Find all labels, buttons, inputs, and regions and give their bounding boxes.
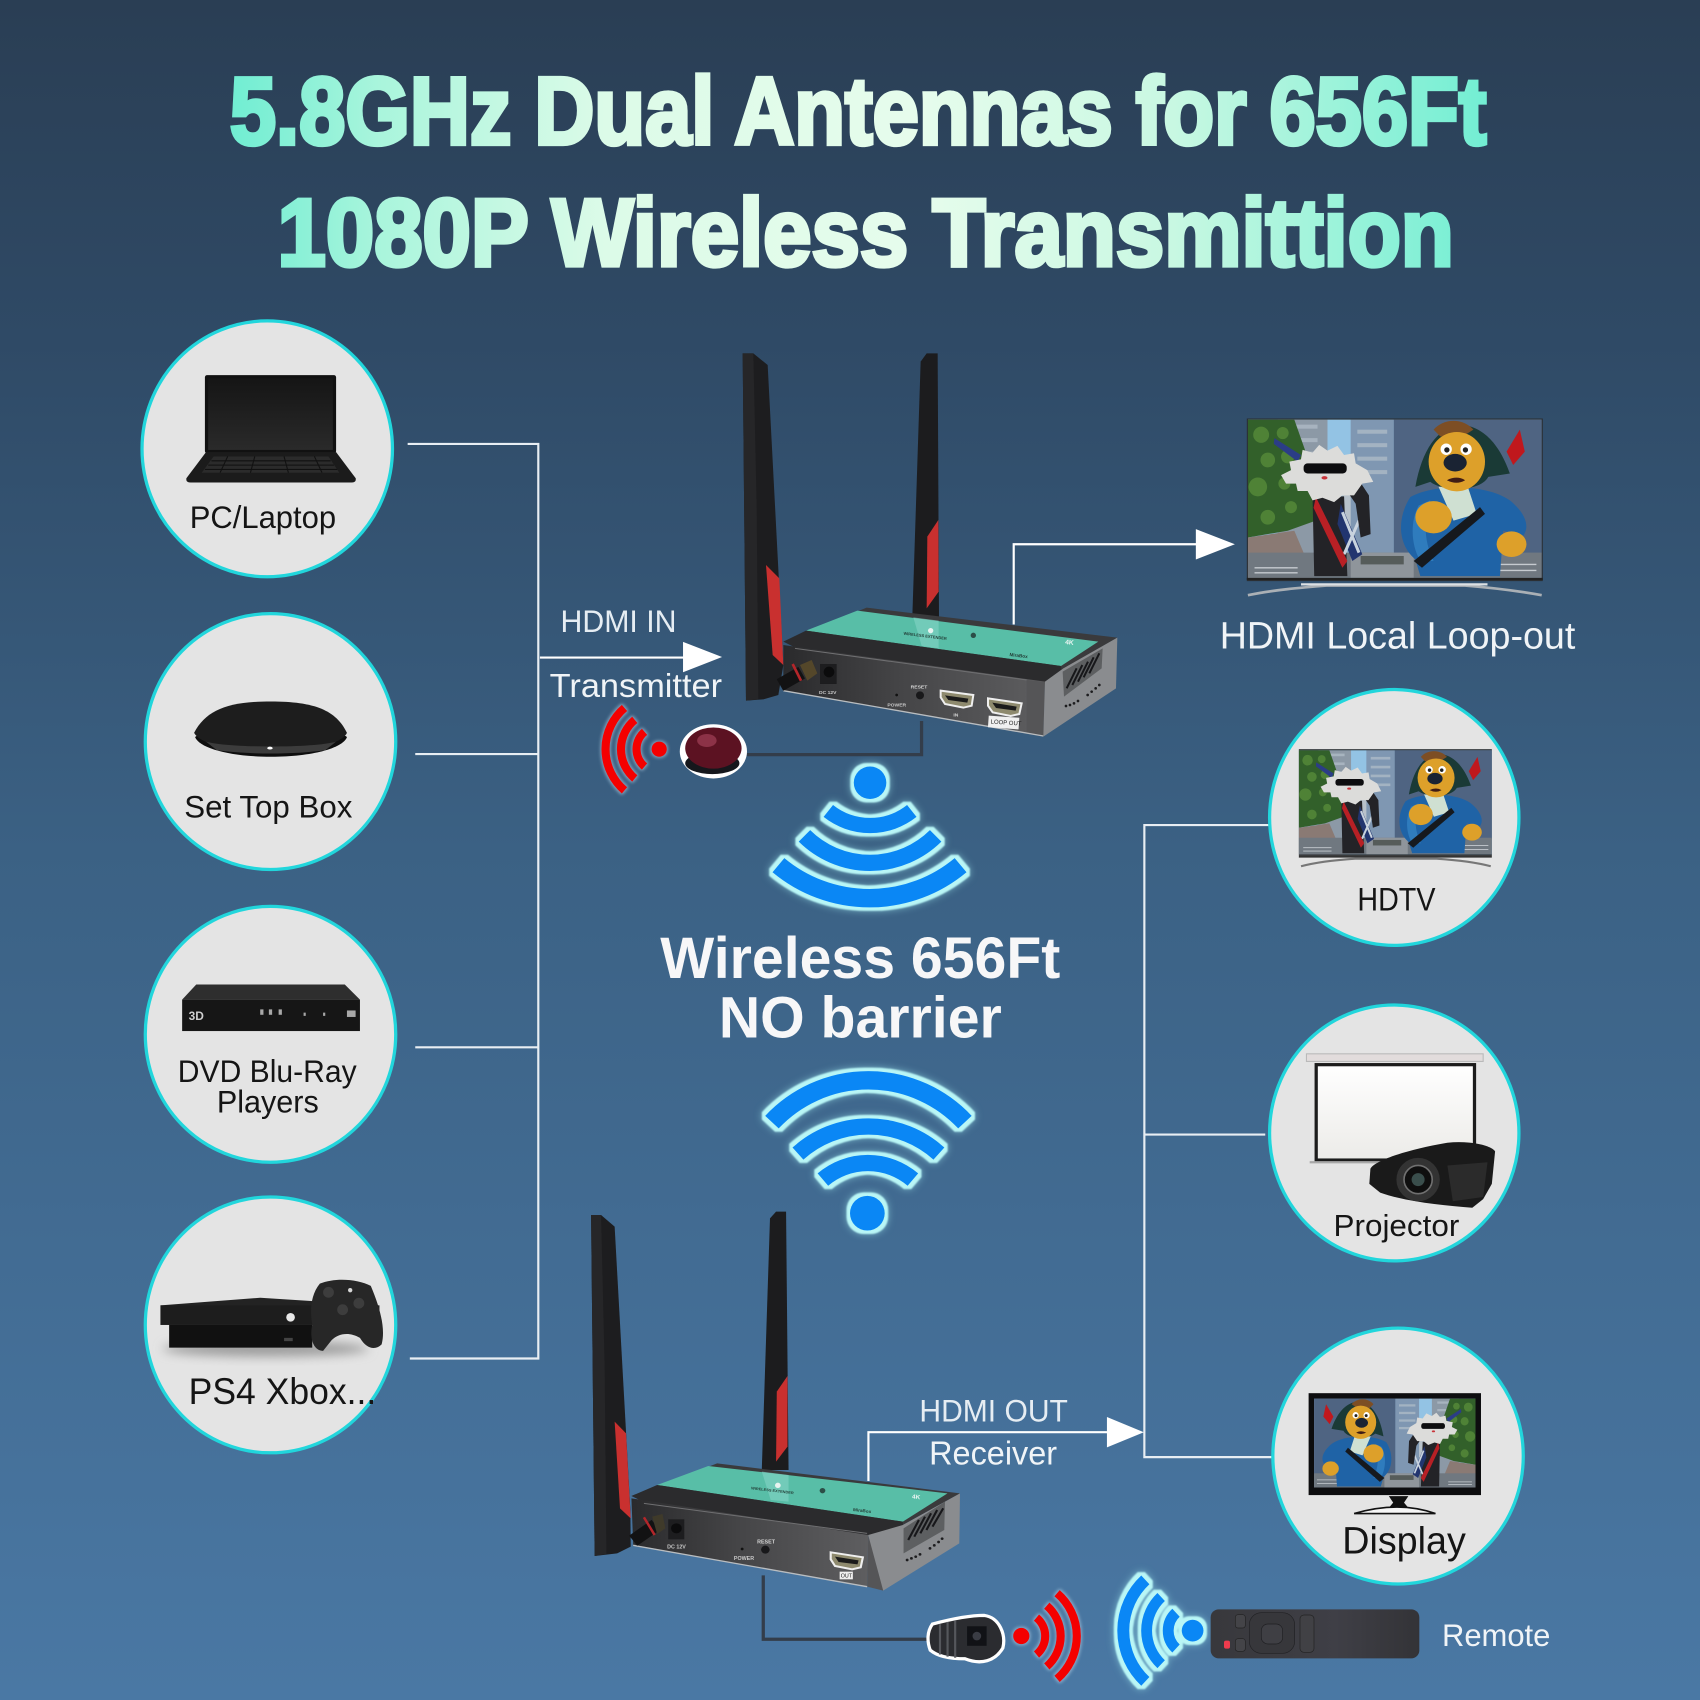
- label: Remote: Remote: [1442, 1618, 1550, 1653]
- icon: game console and controller: [160, 1280, 383, 1356]
- transmitter device: LOOP OUT: [990, 719, 1022, 728]
- TV: HDMI local loop-out: [1247, 418, 1543, 595]
- icon: monitor: [1309, 1393, 1481, 1514]
- transmitter device: MiraBox: [1009, 652, 1028, 659]
- receiver device: RESET: [757, 1539, 776, 1545]
- icon: blu-ray player: 3D: [189, 1009, 204, 1023]
- transmitter device: 4K: [1065, 639, 1074, 647]
- label: Transmitter: Transmitter: [550, 668, 722, 705]
- icon: set top box: [194, 701, 347, 757]
- remote control: [1211, 1609, 1419, 1658]
- transmitter device: [743, 353, 1117, 737]
- icon: red IR waves, receiver: [1013, 1593, 1077, 1679]
- panel: PS4 Xbox: [145, 1197, 396, 1453]
- label: DVD Blu-Ray Players: [178, 1054, 357, 1119]
- transmitter device: DC 12V: [819, 690, 837, 696]
- transmitter device: POWER: [887, 703, 907, 709]
- icon: HDTV set: [1299, 749, 1492, 866]
- icon: wifi signal, top: [778, 767, 961, 898]
- label: HDMI Local Loop-out: HDMI Local Loop-out: [1220, 615, 1576, 657]
- panel: HDTV: [1270, 690, 1519, 945]
- panel: PC/Laptop: [142, 321, 392, 577]
- label: PC/Laptop: PC/Laptop: [190, 500, 336, 535]
- title: 5.8GHz Dual Antennas for 656Ft: [230, 59, 1486, 165]
- receiver device: DC 12V: [667, 1544, 686, 1550]
- icon: blue remote signal: [1123, 1580, 1203, 1681]
- panel: DVD Blu-Ray Players: [145, 906, 396, 1162]
- receiver device: POWER: [734, 1556, 754, 1562]
- title: [230, 59, 1486, 287]
- IR cable: transmitter: [747, 721, 922, 755]
- icon: projector: [1369, 1142, 1495, 1208]
- label: Set Top Box: Set Top Box: [184, 789, 353, 824]
- label: Receiver: Receiver: [929, 1436, 1057, 1473]
- label: Display: Display: [1342, 1521, 1466, 1563]
- panel: Projector: [1270, 1005, 1519, 1261]
- arrow: HDMI IN: [540, 642, 722, 672]
- icon: wifi signal, bottom: [772, 1080, 965, 1231]
- icon: projection screen: [1306, 1054, 1483, 1162]
- arrow: HDMI OUT: [868, 1417, 1144, 1481]
- panel: Display: [1273, 1328, 1523, 1584]
- icon: red IR waves, transmitter: [606, 708, 667, 790]
- heading: Wireless 656Ft NO barrier: Wireless 656Ft: [660, 926, 1060, 991]
- heading: Wireless 656Ft NO barrier: [660, 926, 1060, 1051]
- icon: blu-ray player: [182, 984, 360, 1031]
- label: PS4 Xbox: PS4 Xbox...: [189, 1371, 376, 1412]
- IR emitter: transmitter: [680, 724, 747, 778]
- IR cable: receiver: [763, 1575, 932, 1639]
- title: 1080P Wireless Transmittion: [278, 181, 1454, 287]
- arrow: loop-out: [1014, 529, 1235, 624]
- transmitter device: WIRELESS EXTENDER: [903, 631, 947, 641]
- transmitter device: IN: [953, 713, 959, 719]
- label: DVD Blu-Ray Players: Players: [217, 1084, 319, 1119]
- panel: Set Top Box: [145, 614, 396, 870]
- receiver device: MiraBox: [853, 1507, 872, 1514]
- receiver device: [591, 1212, 960, 1591]
- output connector lines: [1144, 825, 1274, 1457]
- label: DVD Blu-Ray Players: DVD Blu-Ray: [178, 1054, 357, 1089]
- label: Projector: Projector: [1334, 1210, 1459, 1243]
- input connector lines: [408, 444, 538, 1358]
- transmitter device: RESET: [911, 684, 927, 690]
- IR receiver eye: [928, 1615, 1004, 1662]
- receiver device: WIRELESS EXTENDER: [751, 1486, 794, 1495]
- label: HDMI IN: HDMI IN: [561, 604, 677, 639]
- receiver device: OUT: [841, 1573, 853, 1579]
- label: HDTV: HDTV: [1357, 882, 1436, 918]
- icon: laptop: [186, 375, 356, 482]
- label: HDMI OUT: HDMI OUT: [919, 1393, 1068, 1428]
- heading: Wireless 656Ft NO barrier: NO barrier: [719, 986, 1002, 1051]
- receiver device: 4K: [912, 1494, 921, 1501]
